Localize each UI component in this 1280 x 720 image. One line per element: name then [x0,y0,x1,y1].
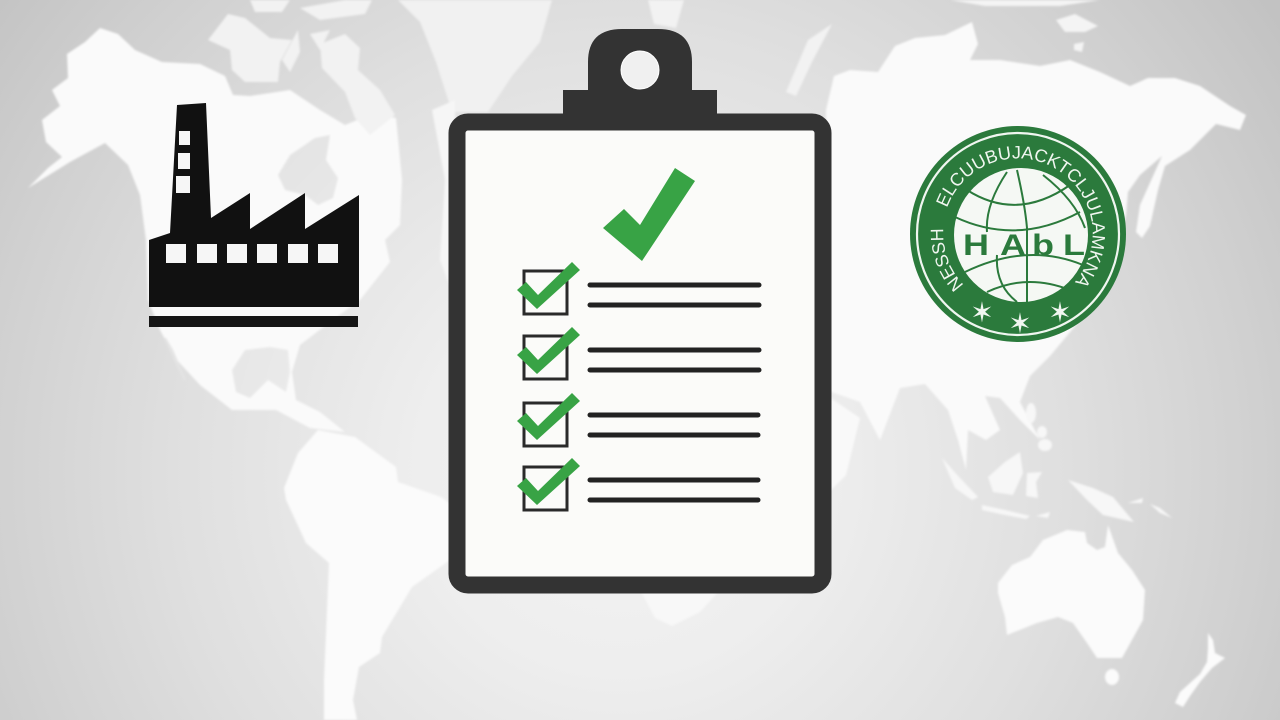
seal stars: ✶ [1048,297,1072,328]
map: Arctic islands [208,0,395,135]
ground bar [149,316,358,327]
seal outer ring [917,133,1119,335]
clip hole [621,51,659,89]
checklist row 2 [517,327,759,379]
seal centre word: HAbL [963,229,1085,262]
globe grid [955,170,1085,302]
map: Tasmania [1105,669,1119,685]
seal globe [954,168,1088,302]
seal disc [910,126,1126,342]
map: Iceland and Svalbard [648,0,684,28]
seal stars: ✶ [1008,308,1032,339]
clip [563,29,717,120]
map: Greenland [398,0,552,112]
map: North America [28,28,402,432]
large check mark [603,168,695,261]
checklist row 1 [517,262,759,314]
map: Africa east coast [826,395,860,495]
seal stars: ✶ [970,297,994,328]
map: Africa tip [640,590,720,626]
map: Atlantic land patch [432,100,455,300]
icon: factory [149,103,359,327]
factory windows [166,244,338,263]
map: Eurasia [826,22,1246,470]
map: Southeast Asia islands [942,403,1172,522]
map: South America [284,430,452,720]
map: Gulf of Mexico [232,347,290,398]
checklist row 4 [517,458,758,510]
map: New Zealand [1175,633,1225,707]
board [457,122,823,585]
map: Australia [998,525,1145,658]
map: Arctic Asian islands [950,0,1100,52]
icon: halal seal [910,126,1126,342]
map: Baja California [165,338,185,380]
icon: clipboard [457,29,823,585]
seal stars [970,297,1072,339]
chimney windows [176,131,190,193]
checklist row 3 [517,393,758,446]
seal ring text: ELCUUBUJACKTCLJULAMKNA [936,146,1105,286]
factory body [149,103,359,307]
map: Hudson Bay [278,135,338,205]
